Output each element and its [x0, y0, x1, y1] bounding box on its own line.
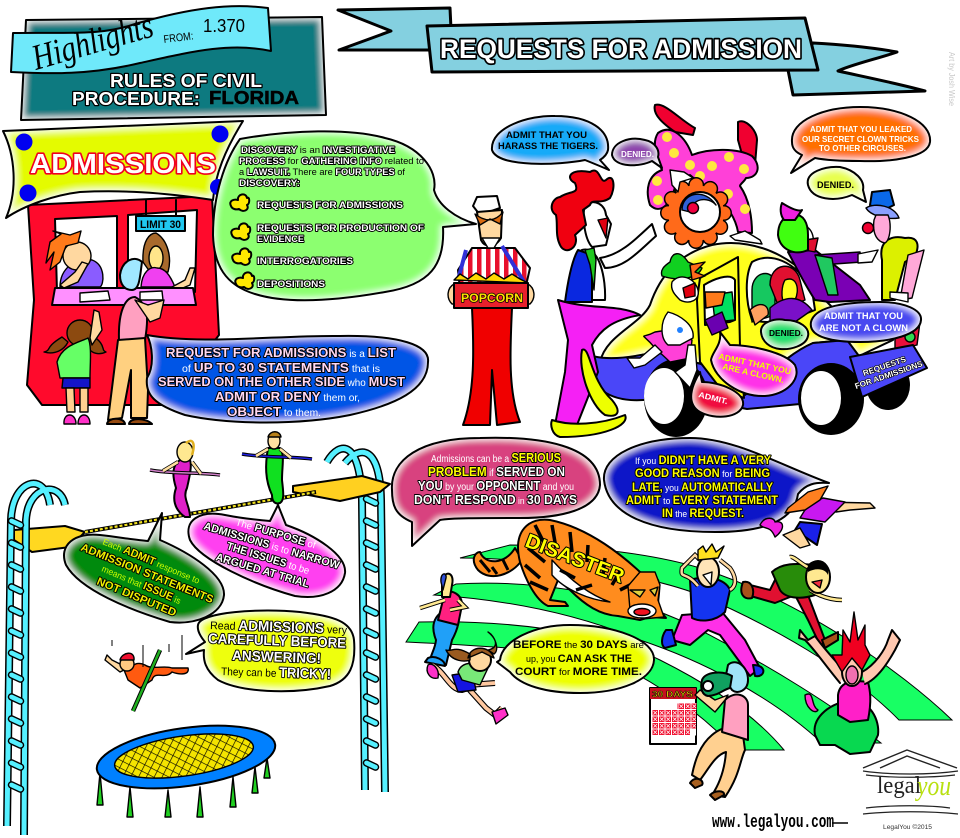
character: camera person	[690, 662, 748, 800]
banner studs	[16, 126, 228, 202]
bubble: admit	[691, 372, 743, 417]
car window with clowns	[704, 258, 815, 335]
illustration: right ladder	[293, 449, 390, 792]
character: falling acrobat	[105, 635, 188, 711]
discovery definition: PROCESS for GATHERING INFO related to	[239, 156, 424, 167]
character: blue hat clown	[862, 190, 924, 302]
bubble: admit that you are a clown	[711, 332, 797, 396]
callout: purpose of admissions: ADMISSIONS is to NARROW	[202, 520, 341, 572]
character: running green shirt man	[741, 557, 842, 648]
highlights ribbon: 1.370	[203, 16, 245, 36]
illustration: green stripes	[406, 545, 952, 750]
bubble: admit that you are a clown: ARE A CLOWN.	[722, 361, 785, 385]
art credit: Art by Josh Wise	[947, 52, 956, 106]
callout: before the 30 days: COURT for MORE TIME.	[515, 666, 642, 678]
callout: request for admissions: REQUEST FOR ADMISSIONS is a LIST	[166, 345, 396, 360]
discovery list: REQUESTS FOR ADMISSIONS	[257, 200, 403, 211]
callout: request for admissions: of UP TO 30 STATEMENTS that is	[182, 360, 380, 375]
customer: blue hair	[107, 259, 164, 424]
callout: purpose of admissions: THE ISSUES to be	[225, 540, 311, 577]
character: handstand clown	[648, 105, 762, 244]
car body	[582, 340, 862, 409]
callout: read admissions carefully: Read ADMISSIONS very	[210, 616, 348, 637]
highlights ribbon	[11, 5, 271, 78]
callout: purpose of admissions	[188, 505, 345, 597]
calendar crossed days	[652, 703, 696, 736]
limit 30 sign	[136, 200, 185, 231]
clerk: orange hair	[46, 231, 103, 288]
illustration: tightrope	[85, 492, 316, 532]
bubble: denied purple	[612, 139, 662, 168]
illustration: tiger	[474, 520, 666, 620]
callout: serious problem	[392, 438, 600, 546]
callout: late reason: GOOD REASON for BEING	[635, 468, 770, 480]
discovery definition	[239, 145, 424, 189]
bubble: denied yellow	[808, 167, 866, 202]
illustration: circus car	[582, 243, 927, 437]
bubble: denied purple: DENIED.	[621, 149, 654, 159]
character: purple coat clown	[778, 203, 878, 302]
callout: admit response means not disputed: NOT DISPUTED	[95, 576, 178, 619]
header text: RULES OF CIVIL	[110, 71, 262, 91]
panel: rules of civil procedure header	[11, 5, 326, 120]
trampoline legs	[97, 758, 270, 817]
booth windows	[55, 210, 197, 292]
counter	[52, 288, 196, 305]
bubble: denied mint: DENIED.	[769, 329, 803, 338]
car tail light	[895, 322, 920, 350]
discovery list: DEPOSITIONS	[257, 279, 325, 290]
limit 30 sign: LIMIT 30	[140, 219, 181, 231]
callout: serious problem: Admissions can be a SERIOUS	[431, 450, 561, 465]
callout: late reason: ADMIT to EVERY STATEMENT	[626, 495, 778, 507]
bubble: admit that you harass the tigers: HARASS THE TIGERS.	[498, 141, 598, 152]
character: running girl	[427, 632, 508, 724]
callout: request for admissions: ADMIT OR DENY them or,	[215, 389, 360, 404]
illustration: popcorn vendor	[448, 196, 534, 425]
callout: before the 30 days	[497, 625, 654, 693]
bubble: admit that you are not a clown: ADMIT THAT YOU	[824, 311, 903, 322]
illustration: admissions booth	[27, 196, 219, 424]
character: woman with pink top	[420, 574, 465, 666]
character: running blue shirt man	[662, 544, 763, 676]
callout: read admissions carefully: They can be TRICKY!	[221, 662, 331, 682]
callout: late reason	[604, 438, 829, 532]
illustration: left ladder	[7, 484, 85, 835]
car door	[697, 257, 744, 398]
callout: admit response means not disputed: Each ADMIT response to	[101, 536, 202, 587]
character: falling clown	[627, 312, 697, 388]
callout: late reason: If you DIDN'T HAVE A VERY	[635, 455, 771, 467]
discovery definition: a LAWSUIT. There are FOUR TYPES of	[239, 167, 405, 178]
callout: late reason: IN the REQUEST.	[662, 508, 744, 520]
car rear panel: FOR ADMISSIONS	[854, 359, 924, 391]
logo: legalyou: you	[914, 771, 951, 802]
discovery list: REQUESTS FOR PRODUCTION OF	[257, 223, 424, 234]
far wheel	[866, 360, 910, 410]
bubble: admit that you are a clown: ADMIT THAT YOU	[718, 351, 792, 376]
illustration: 30 days calendar	[650, 688, 696, 744]
discovery definition: DISCOVERY is an INVESTIGATIVE	[241, 145, 395, 156]
title banner: requests for admission: REQUESTS FOR ADMISSION	[440, 34, 802, 64]
callout: read admissions carefully	[186, 611, 354, 691]
car rear panel: REQUESTS	[862, 355, 908, 378]
callout: purpose of admissions: ARGUED AT TRIAL	[214, 551, 311, 591]
tiger head	[628, 572, 664, 619]
bubble: admit that you are not a clown: ARE NOT A CLOWN	[819, 323, 908, 334]
callout: serious problem: DON'T RESPOND in 30 DAYS	[414, 492, 577, 507]
near wheels	[644, 359, 864, 437]
callout: request for admissions: SERVED ON THE OTHER SIDE who MUST	[158, 374, 405, 389]
bubble: admit that you harass the tigers	[492, 116, 609, 170]
logo: legalyou: legal	[877, 773, 921, 799]
bubble: admit: ADMIT.	[698, 390, 729, 406]
character: clown in green hat	[661, 254, 705, 302]
header text: FLORIDA	[209, 88, 299, 108]
discovery list: INTERROGATORIES	[257, 256, 353, 267]
discovery list: EVIDENCE	[257, 234, 304, 245]
ladder rungs	[7, 517, 25, 793]
callout: late reason: LATE, you AUTOMATICALLY	[632, 482, 773, 494]
title banner: requests for admission	[338, 8, 925, 95]
bubble: admit that you are not a clown	[811, 302, 921, 342]
callout: purpose of admissions: The PURPOSE of	[234, 516, 317, 552]
callout: request for admissions	[147, 335, 428, 422]
character: red hair woman	[799, 612, 900, 754]
banner: admissions sign: ADMISSIONS	[30, 148, 216, 179]
booth body	[27, 196, 219, 405]
header text	[72, 71, 299, 109]
callout: read admissions carefully: ANSWERING!	[232, 647, 321, 666]
bubble: denied yellow: DENIED.	[817, 180, 854, 190]
character: magenta tightrope walker	[150, 441, 220, 517]
illustration: popcorn vendor: POPCORN	[461, 291, 523, 305]
illustration: trampoline	[93, 716, 279, 817]
callout: read admissions carefully: CAREFULLY BEFORE	[208, 630, 346, 651]
callout: serious problem: PROBLEM if SERVED ON	[428, 464, 565, 479]
callout: admit response means not disputed	[64, 513, 224, 623]
illustration: 30 days calendar: 30 DAYS	[652, 689, 693, 699]
bubble: admit that you harass the tigers: ADMIT THAT YOU	[506, 130, 587, 141]
callout: before the 30 days: up, you CAN ASK THE	[526, 653, 632, 665]
callout: admit response means not disputed: means that ISSUE is	[100, 563, 183, 607]
banner: admissions sign	[3, 121, 243, 218]
discovery list	[257, 200, 424, 290]
callout: request for admissions: OBJECT to them.	[227, 404, 321, 419]
header text: PROCEDURE:	[72, 89, 200, 109]
logo: legalyou	[863, 750, 958, 831]
icon: popcorn bullets	[230, 194, 254, 289]
child at counter	[44, 310, 106, 424]
bubble: leaked clown tricks: OUR SECRET CLOWN TRICKS	[802, 134, 919, 144]
logo: legalyou: LegalYou ©2015	[883, 824, 933, 831]
right platform	[293, 476, 390, 501]
callout: before the 30 days: BEFORE the 30 DAYS are	[513, 639, 644, 651]
car rear panel	[850, 345, 927, 397]
character: green tightrope walker	[242, 432, 312, 503]
highlights ribbon: FROM:	[163, 30, 194, 46]
bubble: leaked clown tricks	[791, 107, 930, 173]
callout: discovery	[213, 131, 476, 300]
yellow shoes	[551, 350, 626, 437]
callouts: clown speech bubbles	[492, 107, 930, 417]
discovery definition: DISCOVERY:	[239, 178, 300, 189]
tiger label: DISASTER	[522, 530, 628, 588]
callout: admit response means not disputed: ADMISSION STATEMENTS	[79, 542, 215, 606]
bubble: denied mint	[761, 320, 808, 349]
bubble: leaked clown tricks: ADMIT THAT YOU LEAKED	[810, 124, 912, 134]
bubble: leaked clown tricks: TO OTHER CIRCUSES.	[819, 143, 906, 153]
website address: www.legalyou.com	[712, 813, 834, 833]
character: ringmaster clown	[551, 170, 656, 437]
callout: serious problem: YOU by your OPPONENT and you	[418, 478, 574, 493]
clerk: brown hair	[141, 233, 195, 290]
character: flying person	[760, 486, 875, 548]
car roof	[600, 243, 893, 395]
left platform	[14, 526, 85, 552]
tiger stripes	[525, 525, 640, 590]
